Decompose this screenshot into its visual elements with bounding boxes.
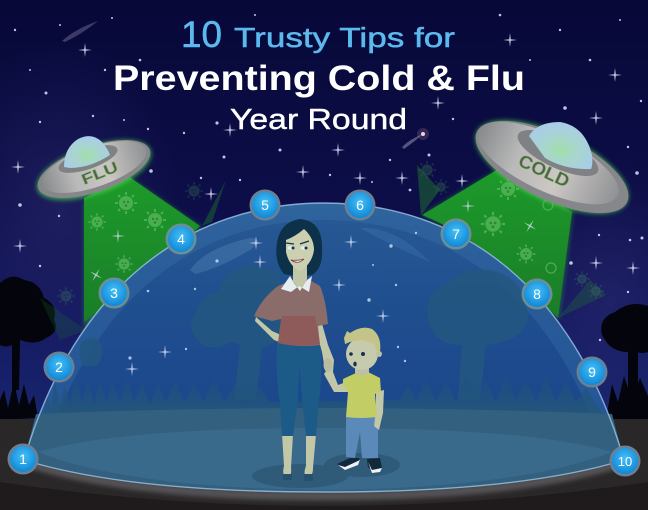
dome outline <box>24 203 624 492</box>
cold viruses <box>461 178 556 273</box>
woman feet shadow <box>283 474 313 481</box>
ground <box>0 419 648 510</box>
numbered badges <box>8 190 640 476</box>
flu saucer <box>29 128 159 212</box>
background trees outside dome <box>0 277 648 420</box>
child <box>324 328 400 477</box>
title <box>113 14 525 136</box>
woman hair <box>276 219 322 276</box>
badge 9 <box>576 356 608 388</box>
badge 2 <box>44 352 74 382</box>
woman right arm skin <box>255 317 292 343</box>
dome ground <box>24 408 624 492</box>
cold saucer <box>462 101 642 233</box>
child hair <box>344 328 380 352</box>
child shoes <box>337 458 382 472</box>
woman lower legs <box>282 434 316 476</box>
woman neck <box>293 262 307 291</box>
hand clasp <box>324 358 332 372</box>
badge 9: 9 <box>588 364 596 380</box>
badge 10: 10 <box>618 454 632 469</box>
child jeans <box>346 416 378 458</box>
badge 5 <box>250 190 280 220</box>
child arm <box>324 368 348 392</box>
child neck <box>355 366 369 376</box>
flu viruses <box>86 192 166 285</box>
saucer dome base <box>512 121 604 185</box>
upper-right dome glare <box>360 228 430 262</box>
woman shadow <box>252 464 348 488</box>
title line 1: 10 <box>181 14 222 55</box>
saucer dome <box>529 122 592 169</box>
woman eyes and mouth <box>286 241 309 262</box>
badge 6 <box>344 190 376 220</box>
badge 1 <box>8 444 38 474</box>
badge 10 <box>610 446 640 476</box>
trees inside dome <box>79 265 528 400</box>
saucer disc <box>463 102 641 232</box>
dome floor ellipse <box>38 428 612 490</box>
saucer glow <box>29 128 159 212</box>
glass dome <box>24 203 624 492</box>
child right arm <box>374 390 384 430</box>
badge 7 <box>440 218 472 250</box>
saucer dome <box>64 136 110 168</box>
child eyes and mouth <box>349 352 365 366</box>
badge 8: 8 <box>533 286 541 302</box>
child shadow <box>324 453 400 477</box>
grass <box>44 374 604 415</box>
small flu beam remnants <box>40 180 226 340</box>
dome body <box>24 203 624 492</box>
badge 7: 7 <box>452 226 460 242</box>
badge 5: 5 <box>261 197 269 213</box>
title line 2: Preventing Cold & Flu <box>113 59 525 98</box>
flu beam <box>84 176 203 330</box>
woman left arm skin <box>316 320 334 372</box>
child shirt <box>343 372 381 418</box>
woman collar <box>281 276 312 292</box>
woman <box>252 219 348 488</box>
small cold beam remnants <box>417 161 606 318</box>
saucer label: FLU <box>79 159 121 189</box>
saucer dome base <box>55 139 121 179</box>
badge 8 <box>522 278 552 310</box>
woman top <box>254 279 328 346</box>
comet near cold saucer <box>402 128 429 149</box>
upper-left dome glare <box>190 238 258 274</box>
badge 3 <box>98 278 130 308</box>
dome inner rim band <box>41 204 608 414</box>
badge 1: 1 <box>19 451 27 467</box>
comet top left <box>62 21 98 42</box>
ground shadow band <box>0 482 648 510</box>
woman face <box>286 229 314 271</box>
cold beam <box>421 168 574 320</box>
badge 3: 3 <box>110 285 118 301</box>
glow under dome <box>24 462 624 496</box>
stars inside dome <box>125 232 417 376</box>
title line 1 <box>181 14 455 55</box>
saucer disc <box>31 128 157 210</box>
title line 1: Trusty Tips for <box>234 22 455 53</box>
badge 6: 6 <box>356 197 364 213</box>
saucer label: COLD <box>515 150 573 191</box>
badge 2: 2 <box>55 359 63 375</box>
woman leggings <box>276 341 322 436</box>
star field <box>11 14 644 341</box>
saucer glow <box>462 101 642 233</box>
badge 4 <box>166 224 196 254</box>
badge 4: 4 <box>177 231 185 247</box>
child face <box>346 338 378 370</box>
title line 3: Year Round <box>230 104 407 136</box>
